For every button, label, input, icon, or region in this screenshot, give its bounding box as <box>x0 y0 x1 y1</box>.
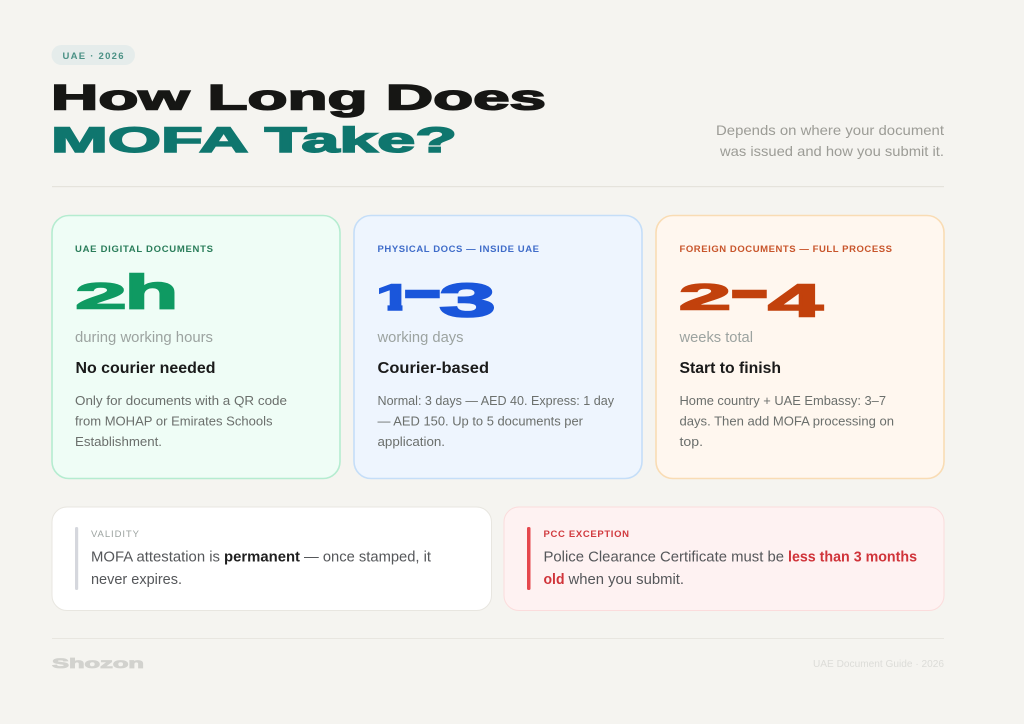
callout: validity: never expires. <box>91 572 182 588</box>
panel: UAE digital documents: Establishment. <box>75 434 162 449</box>
big number: 2h: 2 <box>76 276 126 316</box>
panel: physical docs inside UAE: working days <box>376 330 464 346</box>
panel: physical docs inside UAE: PHYSICAL DOCS — INSIDE UAE <box>378 244 539 255</box>
big number: 2-4 <box>679 257 824 326</box>
big number: 2-4: - <box>729 257 770 322</box>
big number: 1-3: - <box>402 257 443 322</box>
callout: PCC exception <box>504 507 944 610</box>
panel: physical docs inside UAE: — AED 150. Up to 5 documents per <box>378 414 584 428</box>
panel: physical docs inside UAE <box>354 216 642 478</box>
tag pill <box>52 45 135 65</box>
panel: physical docs inside UAE: application. <box>378 434 445 449</box>
footer logo: Shozon <box>52 655 144 671</box>
callout: PCC exception: less than 3 months <box>788 550 917 566</box>
panel: UAE digital documents: during working hours <box>75 330 213 346</box>
panel: UAE digital documents: from MOHAP or Emirates Schools <box>75 414 273 428</box>
callout: PCC exception: PCC EXCEPTION <box>544 529 629 540</box>
panel: foreign documents full process: FOREIGN DOCUMENTS — FULL PROCESS <box>680 244 892 255</box>
big number: 1-3 <box>379 282 494 318</box>
subtitle: was issued and how you submit it. <box>719 143 944 159</box>
panel: physical docs inside UAE: Courier-based <box>378 360 489 377</box>
panel: UAE digital documents: No courier needed <box>76 360 216 377</box>
callout: validity: permanent <box>224 550 300 566</box>
title: MOFA Take? <box>51 121 457 160</box>
callout: validity: VALIDITY <box>91 529 140 540</box>
callout: PCC exception: Police Clearance Certificate must be <box>544 550 784 566</box>
big number: 2-4: 2 <box>679 276 731 318</box>
panel: UAE digital documents <box>52 216 340 478</box>
big number: 2-4: 4 <box>768 274 824 326</box>
title <box>51 78 546 160</box>
tag pill: UAE · 2026 <box>62 51 124 62</box>
big number: 1-3: 1 <box>376 277 412 318</box>
panel: foreign documents full process <box>656 216 944 478</box>
big number: 2h: h <box>124 266 178 320</box>
big number: 2h <box>76 266 178 320</box>
panel: foreign documents full process: days. Then add MOFA processing on <box>680 414 894 428</box>
callout: validity: — once stamped, it <box>304 550 431 566</box>
panel: foreign documents full process: Start to finish <box>680 360 781 377</box>
footer note: UAE Document Guide · 2026 <box>813 659 944 670</box>
subtitle <box>716 122 944 159</box>
panel: UAE digital documents: UAE DIGITAL DOCUMENTS <box>75 244 213 255</box>
callout: PCC exception: when you submit. <box>567 572 684 588</box>
panel: UAE digital documents: Only for documents with a QR code <box>75 393 287 408</box>
subtitle: Depends on where your document <box>716 122 944 138</box>
big number: 1-3: 3 <box>439 274 496 326</box>
panel: foreign documents full process: weeks total <box>678 330 753 346</box>
panel: physical docs inside UAE: Normal: 3 days — AED 40. Express: 1 day <box>378 393 614 408</box>
panel: foreign documents full process: top. <box>680 434 703 449</box>
callout: PCC exception: old <box>544 572 564 588</box>
title: How Long Does <box>51 78 546 118</box>
callout: validity: MOFA attestation is <box>91 550 220 566</box>
callout: validity <box>52 507 492 610</box>
panel: foreign documents full process: Home country + UAE Embassy: 3–7 <box>680 393 886 408</box>
